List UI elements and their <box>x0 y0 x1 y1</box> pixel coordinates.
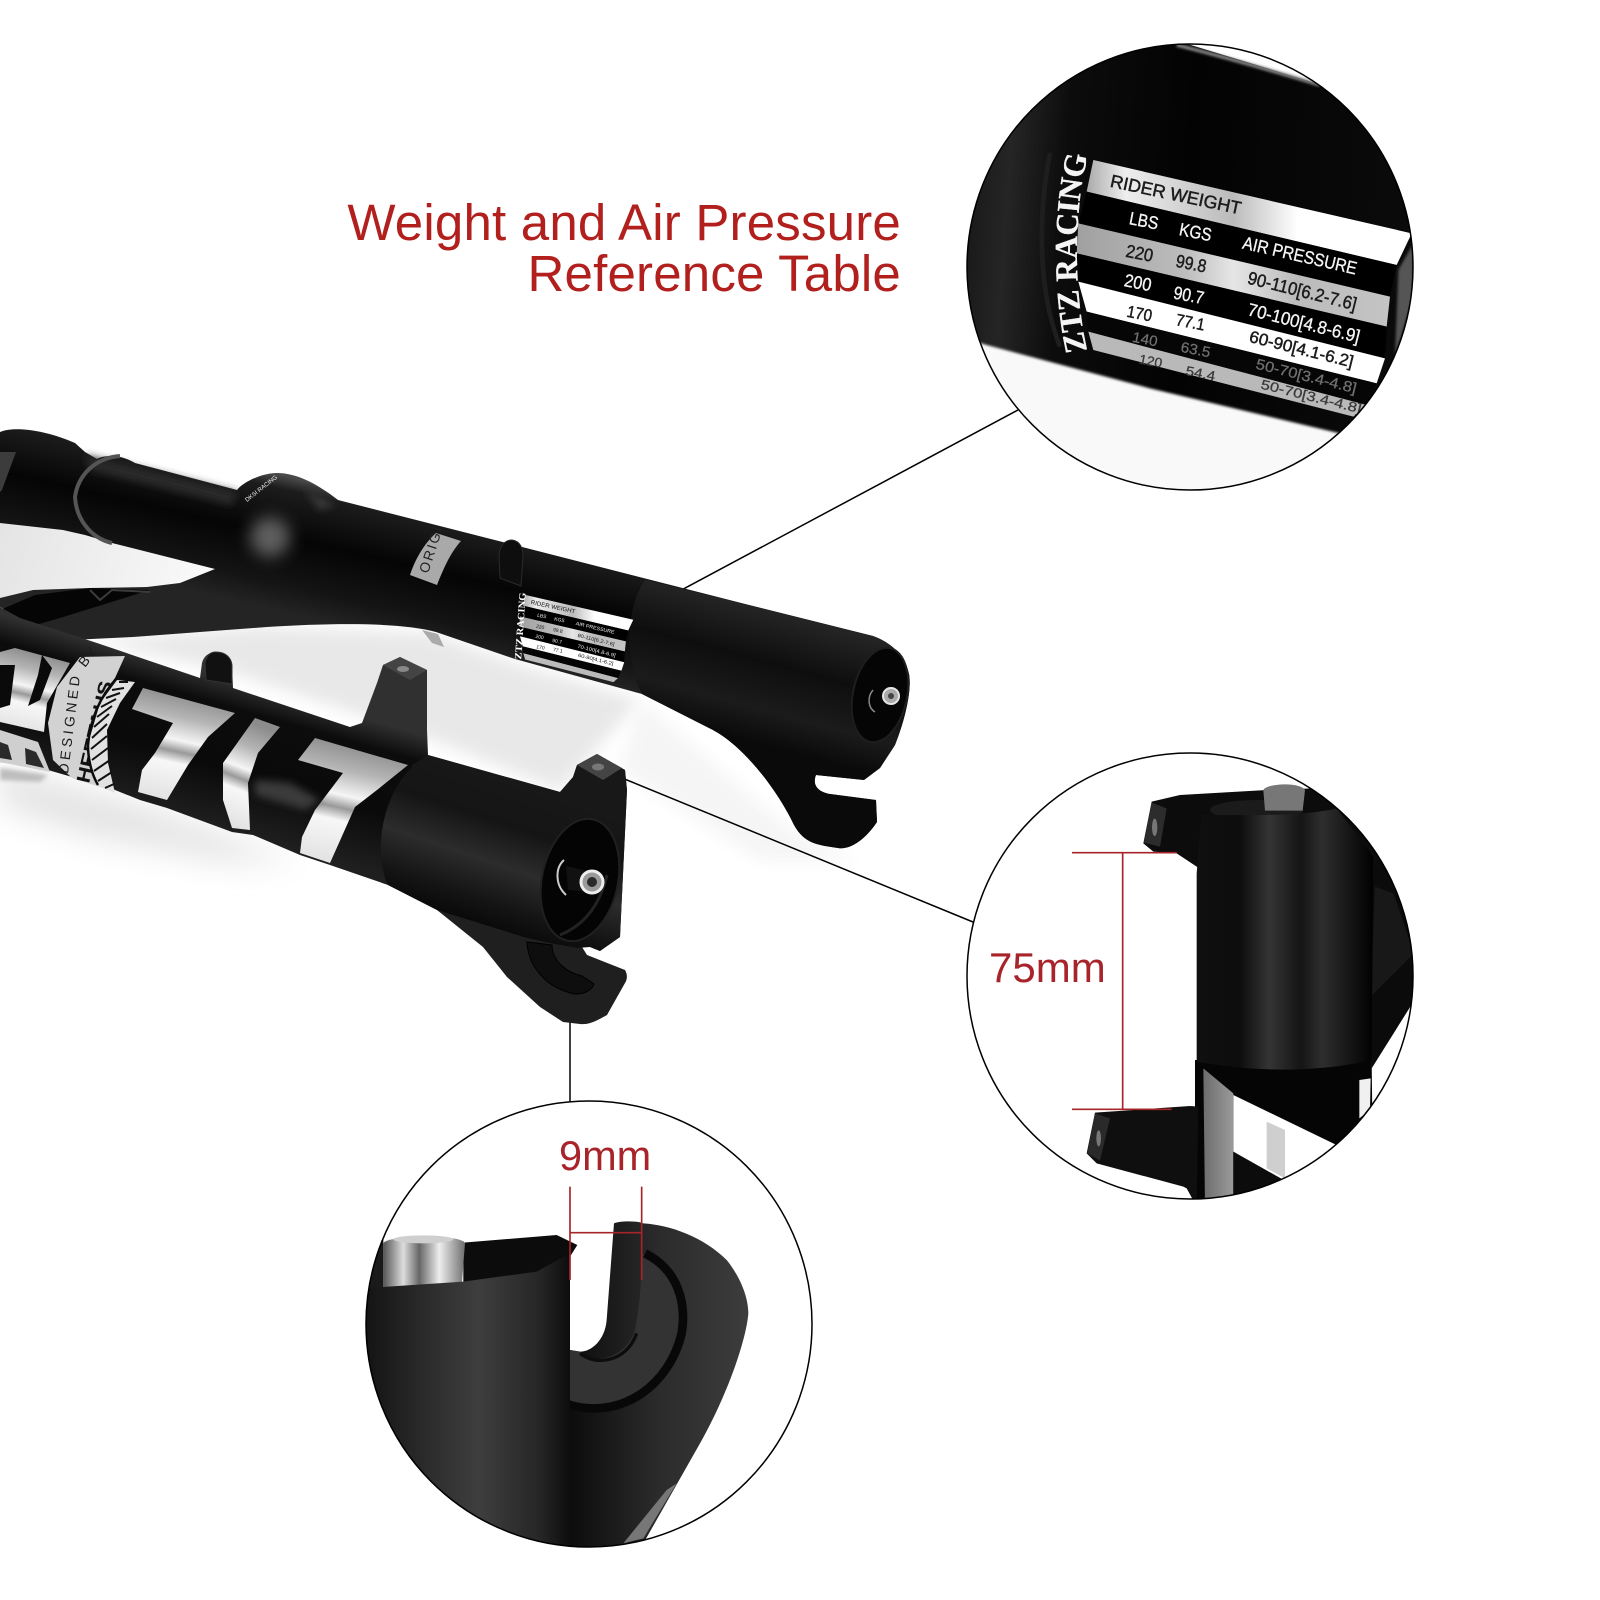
title <box>347 194 901 302</box>
steerer ring <box>75 456 120 543</box>
small weight label: 70-100[4.8-6.9] <box>577 644 617 659</box>
small weight label: 60-90[4.1-6.2] <box>577 653 615 668</box>
mount hole <box>592 764 604 770</box>
lower fork leg <box>0 607 630 1024</box>
tube below cuff <box>1195 1060 1373 1207</box>
upper end cap <box>844 642 916 748</box>
small weight label: 90-110[6.2-7.6] <box>577 633 616 648</box>
measure lines <box>570 1187 642 1280</box>
cylinder body <box>1197 808 1373 1070</box>
small weight label: AIR PRESSURE <box>575 621 616 636</box>
right side dark arm <box>1372 858 1412 1068</box>
small weight label <box>513 592 633 682</box>
steerer tube highlight <box>85 455 237 505</box>
table text: 170 <box>1125 302 1154 325</box>
table text: 70-100[4.8-6.9] <box>1246 299 1362 347</box>
measure lines <box>1072 853 1177 1109</box>
small weight label: 90.7 <box>552 638 563 646</box>
small weight label: 77.1 <box>552 647 563 655</box>
small weight label: LBS <box>537 613 548 621</box>
table text: 63.5 <box>1179 340 1212 361</box>
floor reflections <box>0 627 860 862</box>
white ground <box>980 341 1340 490</box>
small weight label: 200 <box>535 634 544 641</box>
callout: 75mm mount spacing close-up <box>991 784 1412 1198</box>
upper leg matte cuff <box>630 580 910 848</box>
circle outline: 75mm close-up <box>967 753 1413 1199</box>
band text: ORIGI <box>416 523 446 575</box>
crown bulge highlight <box>250 517 290 557</box>
lower axle bolt <box>557 860 603 895</box>
75mm text: 75mm <box>989 944 1106 991</box>
stray strut highlight <box>623 1483 677 1543</box>
arch detail <box>0 588 150 628</box>
table text: 54.4 <box>1184 363 1217 384</box>
table text: 220 <box>1124 241 1155 266</box>
dark wall behind bolt <box>370 1240 384 1288</box>
small weight label: 170 <box>536 644 545 652</box>
cylinder opening <box>1210 800 1303 815</box>
table text: KGS <box>1178 219 1213 245</box>
circle outline: table close-up <box>967 44 1413 490</box>
white diagonal panel <box>1233 1095 1336 1179</box>
silver ORIGINAL band <box>410 533 461 585</box>
band text: cheetahs: HEETAHS <box>73 679 117 785</box>
small weight label: 99.8 <box>552 627 563 635</box>
air valve stem <box>499 540 523 586</box>
table rows <box>1077 160 1412 417</box>
table text: 90-110[6.2-7.6] <box>1246 268 1359 314</box>
table text: 60-90[4.1-6.2] <box>1247 327 1355 371</box>
table text: 140 <box>1131 330 1159 350</box>
hatch pattern <box>88 678 135 793</box>
small weight label: KGS <box>554 616 566 624</box>
band text: by: BY <box>75 642 101 670</box>
dropout hook <box>570 1221 748 1557</box>
callout: 9mm dropout close-up <box>366 1141 748 1546</box>
upper fork leg <box>0 429 916 848</box>
table text: 99.8 <box>1174 251 1208 276</box>
table text: 77.1 <box>1174 310 1207 335</box>
designed-by band <box>48 656 125 787</box>
lower mount ear <box>1087 1106 1198 1207</box>
table text: LBS <box>1128 208 1160 234</box>
black decal letter cuts <box>0 655 52 708</box>
cap end on right <box>1395 243 1413 357</box>
silver decal left of band <box>0 648 70 732</box>
label brand: ZTZ RACING <box>1056 154 1087 353</box>
top bolt <box>1263 784 1305 811</box>
left ear top <box>383 657 427 680</box>
table text: 50-70[3.4-4.8] <box>1259 377 1363 416</box>
small weight label: 220 <box>535 624 545 631</box>
upper mount ear <box>1143 788 1358 868</box>
crown small print: DKSI RACING <box>245 475 279 504</box>
silver bolt <box>383 1236 465 1290</box>
lower silver fleck <box>422 630 444 647</box>
silver seven stripe A <box>132 688 235 800</box>
lower silver decal <box>0 730 50 772</box>
headset collar patch <box>0 452 16 492</box>
small weight label: RIDER WEIGHT <box>530 600 576 615</box>
upper axle bolt <box>883 688 899 704</box>
table text: 50-70[3.4-4.8] <box>1254 357 1358 397</box>
circle outline: 9mm close-up <box>366 1101 812 1547</box>
top-edge peg <box>205 652 232 684</box>
table text: 120 <box>1138 352 1164 371</box>
glossy smear <box>255 780 320 810</box>
matte cuff and dropout <box>381 754 627 951</box>
callout: air pressure table close-up <box>968 44 1412 435</box>
table text: 200 <box>1123 270 1153 295</box>
title: Weight and Air Pressure <box>347 194 901 251</box>
close-up tube shading <box>968 80 1070 360</box>
table text: AIR PRESSURE <box>1241 233 1359 278</box>
silver stripe B <box>223 718 280 830</box>
gap under steerer <box>0 523 215 598</box>
lower end cap <box>530 811 630 949</box>
top-right background <box>1189 44 1314 82</box>
table text <box>1109 171 1363 416</box>
cylinder top interior <box>463 1235 577 1287</box>
small weight label: ZTZ RACING <box>513 592 529 660</box>
9mm text: 9mm <box>559 1132 651 1179</box>
inner crescent <box>570 1254 658 1404</box>
leader lines <box>570 410 1018 1102</box>
table text: RIDER WEIGHT <box>1109 171 1243 218</box>
band text: designed: DESIGNED <box>55 675 83 774</box>
silver seven stripe C <box>298 738 408 863</box>
title: Reference Table <box>528 245 901 302</box>
cuff seam <box>1042 153 1060 347</box>
lower ear top <box>577 754 622 780</box>
table text: 90.7 <box>1172 283 1206 308</box>
main cylinder <box>363 1255 570 1557</box>
gray tube stripe <box>1203 1068 1233 1207</box>
dropout washer <box>527 942 594 994</box>
